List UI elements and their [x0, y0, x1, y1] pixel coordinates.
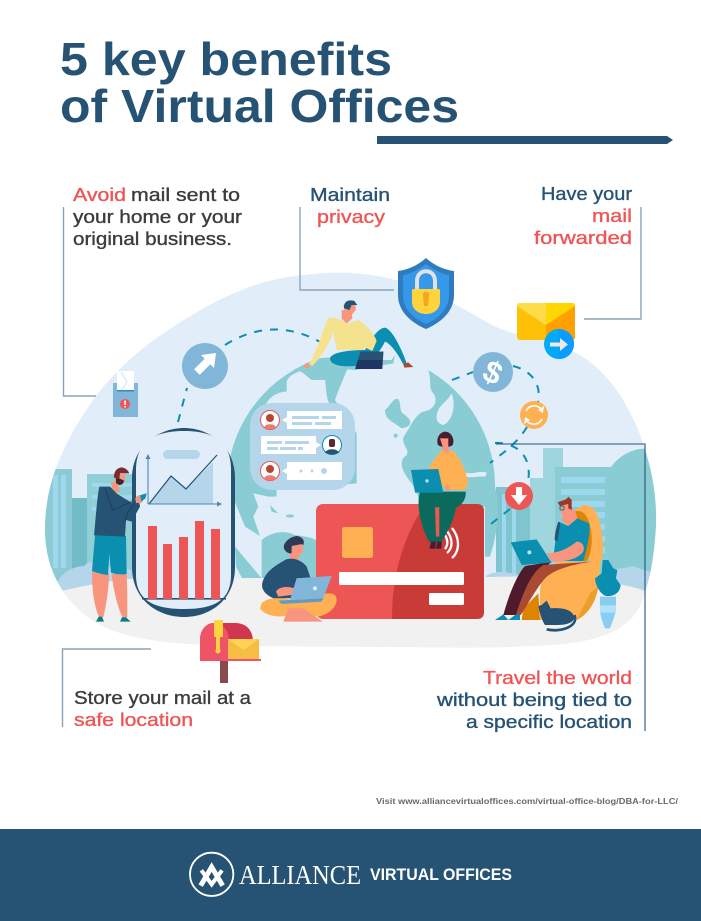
logo mark	[190, 853, 233, 896]
credit card	[316, 504, 484, 619]
illustration background blob	[45, 273, 656, 648]
source url: Visit www.alliancevirtualoffices.com/virtual-office-blog/DBA-for-LLC/	[376, 796, 679, 806]
contactless waves	[445, 528, 458, 558]
text block: store mail	[74, 688, 252, 730]
chat panel	[250, 403, 355, 490]
bar chart	[148, 521, 220, 599]
mailbox	[200, 620, 261, 683]
title	[60, 33, 459, 132]
text block: maintain privacy	[310, 185, 390, 227]
text block: travel the world: Travel the world	[483, 668, 632, 688]
icon: forwarded envelope	[517, 303, 575, 359]
icon: shield with lock	[398, 258, 454, 329]
chat message three	[260, 462, 342, 480]
text block: mail forwarded	[534, 184, 632, 248]
text block: travel the world	[436, 668, 632, 732]
title underline arrow	[377, 136, 673, 144]
card chip	[342, 527, 373, 558]
footer logo: ALLIANCE	[239, 860, 361, 890]
icon: mail with alert	[113, 371, 138, 417]
potted plant	[595, 560, 621, 628]
line chart	[146, 454, 222, 506]
icon: growth arrow	[182, 343, 228, 389]
icon: download circle	[505, 482, 533, 510]
footer logo: VIRTUAL OFFICES	[370, 865, 512, 884]
text block: avoid mail: your home or your	[73, 207, 242, 227]
chat message two	[261, 436, 342, 454]
cat	[538, 601, 575, 630]
person: woman cross-legged with laptop	[260, 536, 337, 622]
text block: mail forwarded: mail	[592, 206, 632, 226]
text block: maintain privacy: Maintain	[310, 185, 390, 205]
person: man with phone	[92, 467, 147, 622]
text block: avoid mail: original business.	[73, 229, 232, 249]
armchair	[522, 505, 603, 620]
text block: travel the world: without being tied to	[436, 690, 632, 710]
text block: maintain privacy: privacy	[317, 207, 385, 227]
footer band	[0, 829, 701, 921]
text block: travel the world: a specific location	[466, 712, 632, 732]
text block: mail forwarded: forwarded	[534, 228, 632, 248]
city skyline and floor	[40, 448, 660, 660]
text block: store mail: Store your mail at a	[74, 688, 252, 708]
footer logo	[190, 853, 512, 896]
callout leader lines	[62, 207, 645, 731]
chat message one	[260, 410, 342, 430]
icon: dollar circle: $	[478, 353, 508, 392]
text block: avoid mail: mail sent to	[131, 185, 240, 205]
text block: mail forwarded: Have your	[541, 184, 632, 204]
text block: store mail: safe location	[74, 710, 193, 730]
person: man in armchair with cat and plant	[495, 497, 621, 630]
person: man on globe	[293, 300, 413, 380]
title: of Virtual Offices	[60, 80, 459, 132]
phone header pill	[163, 450, 200, 459]
phone with charts	[132, 428, 235, 617]
text block: avoid mail	[73, 185, 242, 249]
icon: sync circle	[520, 401, 548, 429]
dashed connector paths	[178, 329, 539, 527]
globe	[230, 364, 498, 578]
title: 5 key benefits	[60, 33, 392, 85]
person: woman on card	[411, 432, 468, 549]
text block: avoid mail: Avoid	[73, 185, 126, 205]
